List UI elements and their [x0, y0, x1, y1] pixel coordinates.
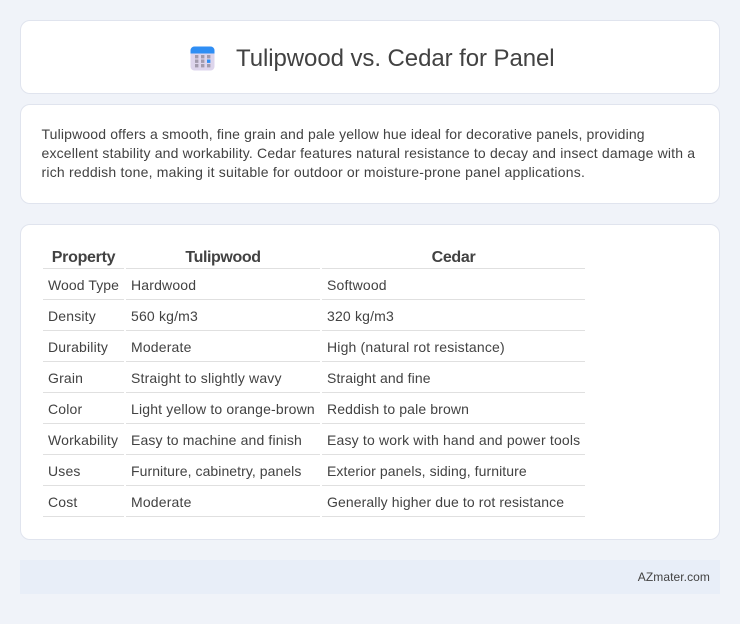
row: workability: Easy to machine and finish — [131, 432, 302, 448]
row: workability — [43, 432, 585, 455]
footer credit: AZmater.com — [638, 570, 710, 584]
text block: description — [42, 126, 696, 180]
table header: Property — [52, 249, 115, 266]
row: color: Reddish to pale brown — [327, 401, 469, 417]
row: uses: Uses — [48, 463, 81, 479]
row: density: 320 kg/m3 — [327, 308, 394, 324]
icon: calendar — [190, 46, 214, 70]
panel: comparison table — [20, 224, 720, 540]
row: cost: Moderate — [131, 494, 192, 510]
row: durability: Durability — [48, 339, 108, 355]
row: density: Density — [48, 308, 96, 324]
row: uses: Exterior panels, siding, furniture — [327, 463, 527, 479]
row: color: Color — [48, 401, 82, 417]
row: workability: Workability — [48, 432, 118, 448]
row: wood type: Softwood — [327, 277, 387, 293]
table header: Cedar — [432, 249, 475, 266]
row: wood type: Hardwood — [131, 277, 196, 293]
row: density: 560 kg/m3 — [131, 308, 198, 324]
row: wood type — [43, 277, 585, 300]
row: workability: Easy to work with hand and power tools — [327, 432, 580, 448]
row: color: Light yellow to orange-brown — [131, 401, 315, 417]
row: density — [43, 308, 585, 331]
text block: description: excellent stability and workability. Cedar features natural resistance to decay and insect damage with a — [42, 145, 695, 161]
row: uses — [43, 463, 585, 486]
row: uses: Furniture, cabinetry, panels — [131, 463, 301, 479]
table header — [43, 249, 585, 269]
row: grain: Straight to slightly wavy — [131, 370, 282, 386]
row: durability — [43, 339, 585, 362]
title: Tulipwood vs. Cedar for Panel — [236, 45, 555, 72]
row: wood type: Wood Type — [48, 277, 119, 293]
table header: Tulipwood — [185, 249, 261, 266]
row: grain: Straight and fine — [327, 370, 431, 386]
text block: description: Tulipwood offers a smooth, fine grain and pale yellow hue ideal for decorative panels, providing — [42, 126, 645, 142]
row: durability: High (natural rot resistance) — [327, 339, 505, 355]
panel: description — [20, 104, 720, 204]
row: grain — [43, 370, 585, 393]
row: cost — [43, 494, 585, 517]
panel: title card — [20, 20, 720, 94]
row: durability: Moderate — [131, 339, 192, 355]
row: grain: Grain — [48, 370, 83, 386]
footer — [20, 560, 720, 594]
row: cost: Cost — [48, 494, 78, 510]
text block: description: rich reddish tone, making it suitable for outdoor or moisture-prone panel applications. — [42, 164, 585, 180]
table: property comparison — [43, 249, 585, 517]
row: cost: Generally higher due to rot resistance — [327, 494, 564, 510]
row: color — [43, 401, 585, 424]
